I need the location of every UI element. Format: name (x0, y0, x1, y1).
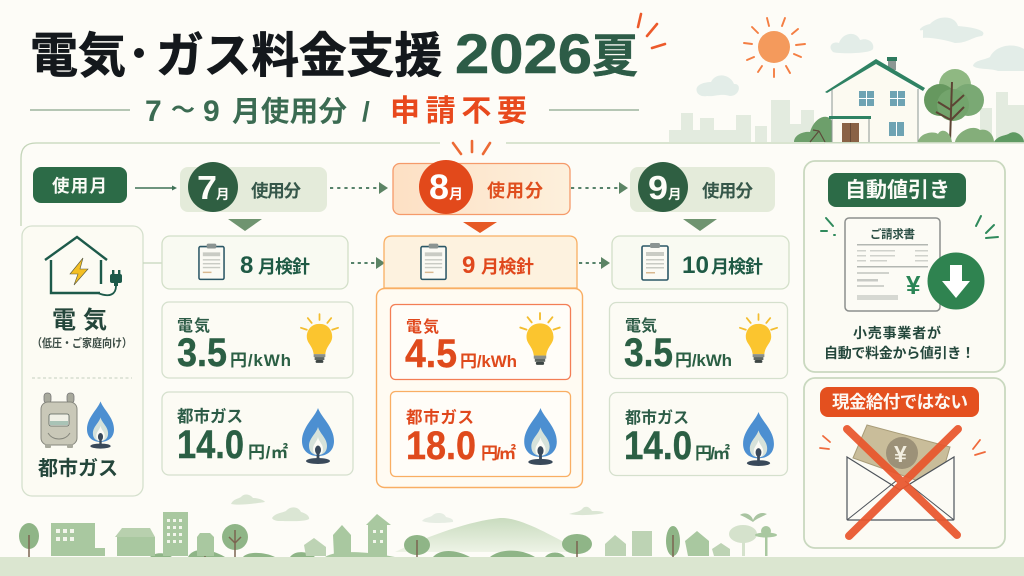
badge: not a cash benefit: 現金給付ではない (832, 392, 968, 412)
mountain (395, 518, 580, 552)
usage: August highlighted (393, 160, 570, 214)
card: September-use gas rate: 14.0 (624, 424, 692, 468)
title: 夏 (592, 30, 638, 82)
card: September meter reading highlighted (384, 236, 577, 288)
subtitle (30, 95, 639, 128)
arrow: usage month to July (135, 186, 177, 190)
illustration: bottom town (0, 494, 1024, 576)
icon: banknote (853, 425, 950, 488)
card: July-use gas rate: 14.0 (177, 423, 244, 467)
icon: invoice (845, 218, 940, 311)
card: August-use gas rate: 円/㎡ (481, 444, 516, 463)
usage: August highlighted: 月 (449, 186, 463, 202)
card: August-use electricity rate: 円/kWh (460, 352, 517, 371)
subtitle: 7 (145, 95, 162, 128)
usage: July: 使用分 (251, 181, 302, 201)
subtitle: ～ (171, 97, 195, 124)
card: July-use gas rate: 都市ガス (177, 406, 243, 426)
card: August meter reading (162, 236, 348, 289)
building windows (56, 519, 383, 543)
arrow: August to September (571, 182, 628, 194)
icon: sparkle right (976, 216, 998, 238)
trees and bushes (19, 523, 680, 557)
usage: September: 使用分 (702, 181, 754, 201)
illustration: house with trees (794, 57, 1024, 144)
panel: energy types (22, 226, 143, 496)
arrow: August down (463, 222, 497, 233)
badge: automatic discount (828, 173, 966, 207)
usage: July: 7 (197, 169, 217, 206)
icon: title accent rays (638, 14, 665, 48)
usage: July (180, 162, 327, 212)
card: September meter reading highlighted: 9 (462, 252, 475, 279)
icon: discount down arrow (928, 252, 984, 310)
card: July-use electricity rate (162, 302, 353, 378)
card: July-use gas rate: 円/㎡ (248, 443, 288, 462)
bottom clouds (231, 494, 767, 523)
icon: sparkle right (973, 440, 985, 455)
usage: September: 9 (648, 169, 668, 206)
badge: not a cash benefit (820, 387, 979, 417)
label: low voltage homes: （低圧・ご家庭向け） (32, 336, 132, 350)
card: October meter reading: 月検針 (711, 257, 763, 277)
card: August-use gas rate (390, 392, 570, 476)
label: electricity: 電気 (52, 307, 107, 334)
card: September-use gas rate: 都市ガス (625, 408, 689, 427)
icon: invoice: ¥ (906, 270, 921, 300)
card: September-use electricity rate: 電気 (625, 316, 657, 335)
card: September-use electricity rate (610, 302, 788, 378)
arrow: September down (683, 219, 717, 231)
title: 2026 (455, 22, 592, 85)
ground (0, 557, 1024, 576)
card: August-use gas rate: 18.0 (406, 424, 476, 468)
subtitle: 月使用分 (232, 96, 347, 128)
text: retailer discount note (824, 325, 975, 361)
card: October meter reading (612, 236, 789, 289)
panel: August highlighted rates (376, 288, 582, 488)
text: retailer discount note: 小売事業者が (853, 325, 941, 341)
card: August meter reading: 月検針 (258, 257, 310, 277)
usage: July: 月 (216, 187, 230, 202)
title: ガス料金支援 (156, 30, 442, 83)
illustration: distant city skyline (669, 92, 1024, 142)
title: 電気 (30, 30, 126, 83)
card: September-use gas rate (610, 392, 788, 476)
card: August-use electricity rate (390, 304, 570, 380)
card: September-use electricity rate: 3.5 (624, 331, 673, 375)
icon: red cross (847, 429, 958, 536)
subtitle: / (362, 96, 370, 127)
icon: sparkle left (820, 436, 830, 449)
icon: banknote: ¥ (894, 441, 907, 467)
usage: August highlighted: 使用分 (487, 181, 543, 201)
panel: main frame outline (21, 143, 825, 226)
arrow: September reading to October reading (579, 257, 610, 269)
card: August-use electricity rate: 電気 (406, 317, 439, 336)
card: October meter reading: 10 (682, 252, 709, 279)
card: August meter reading: 8 (240, 252, 253, 279)
arrow: July down (228, 219, 262, 231)
icon: envelope (847, 457, 954, 520)
connector: energy panel to meter reading (143, 262, 162, 264)
card: September-use gas rate: 円/㎡ (695, 444, 730, 463)
label: usage month (33, 167, 127, 203)
illustration: sun (744, 18, 805, 77)
usage: September (630, 162, 775, 212)
usage: September: 月 (668, 187, 682, 202)
panel: not a cash benefit (804, 378, 1005, 548)
icon: gas meter (41, 393, 77, 448)
buildings (51, 512, 777, 556)
card: July-use electricity rate: 電気 (177, 316, 210, 335)
card: August-use electricity rate: 4.5 (405, 332, 457, 376)
text: retailer discount note: 自動で料金から値引き！ (824, 345, 975, 361)
arrow: August reading to September reading (351, 257, 385, 269)
card: September meter reading highlighted: 月検針 (481, 257, 534, 277)
card: July-use electricity rate: 3.5 (177, 331, 227, 375)
icon: August accent rays (453, 141, 490, 154)
icon: invoice: ご請求書 (870, 227, 915, 241)
icon: gas flame (87, 401, 114, 449)
label: city gas: 都市ガス (38, 457, 118, 480)
title (30, 22, 638, 85)
card: July-use electricity rate: 円/kWh (230, 351, 291, 370)
usage: August highlighted: 8 (429, 168, 449, 207)
subtitle: 9 (203, 95, 220, 128)
arrow: July to August (330, 182, 388, 194)
subtitle: 申請不要 (390, 95, 527, 128)
icon: sparkle left (821, 218, 835, 235)
icon: house with plug (45, 237, 122, 295)
card: August-use gas rate: 都市ガス (406, 407, 474, 427)
panel: automatic discount (804, 161, 1005, 372)
illustration: clouds (697, 17, 1024, 96)
card: July-use gas rate (162, 392, 353, 475)
label: usage month: 使用月 (52, 176, 107, 196)
badge: automatic discount: 自動値引き (845, 179, 950, 202)
card: September-use electricity rate: 円/kWh (675, 351, 732, 370)
